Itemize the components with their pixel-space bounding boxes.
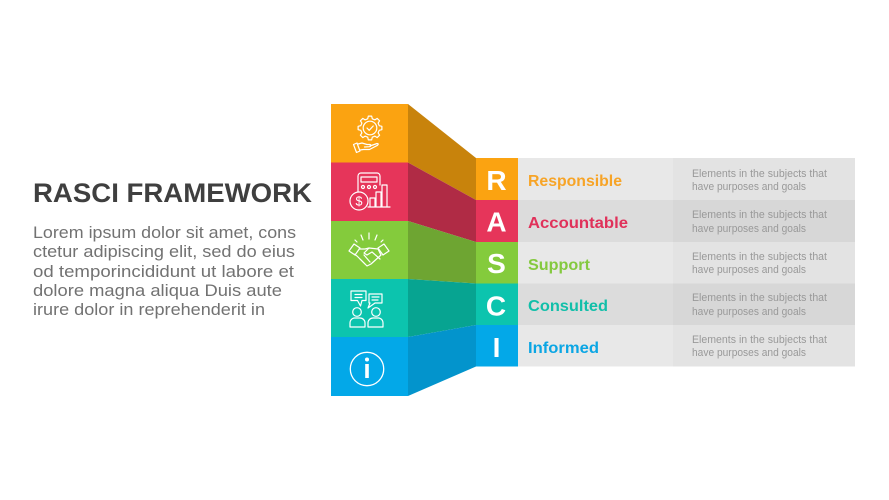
description: Informed [692, 334, 827, 359]
panel: perspective connectors [408, 104, 476, 396]
letter R: R [486, 165, 507, 196]
description: Responsible: Elements in the subjects that [692, 168, 827, 180]
letter S [476, 242, 518, 284]
icon: two people with speech bubbles [350, 291, 383, 327]
icon: information [350, 352, 384, 386]
description: Support: have purposes and goals [692, 264, 806, 276]
letter I: I [493, 332, 500, 363]
icon: calculator, dollar and bars: $ [356, 194, 363, 208]
letter A [476, 200, 518, 242]
body paragraph: Lorem ipsum dolor sit amet, cons [33, 224, 296, 242]
title: RASCI FRAMEWORK [33, 178, 312, 208]
icon: gear and hand [354, 116, 382, 152]
letter R [476, 158, 518, 200]
description: Consulted: have purposes and goals [692, 306, 806, 318]
description: Responsible: have purposes and goals [692, 181, 806, 193]
body paragraph [33, 224, 296, 319]
label: Informed: Informed [528, 340, 599, 357]
description: Accountable [692, 209, 827, 235]
description: Support: Elements in the subjects that [692, 251, 827, 263]
description: Accountable: have purposes and goals [692, 223, 806, 235]
icon: calculator, dollar and bars [350, 173, 390, 210]
label: Responsible: Responsible [528, 173, 622, 190]
description: Consulted: Elements in the subjects that [692, 292, 827, 304]
panel: row backgrounds [518, 158, 855, 366]
description: Informed: have purposes and goals [692, 347, 806, 359]
letter A: A [486, 206, 507, 238]
letter I [476, 325, 518, 366]
body paragraph: ctetur adipiscing elit, sed do eius [33, 243, 295, 261]
body paragraph: irure dolor in reprehenderit in [33, 301, 265, 319]
body paragraph: od temporincididunt ut labore et [33, 263, 294, 281]
body paragraph: dolore magna aliqua Duis aute [33, 282, 282, 300]
letter C: C [486, 290, 506, 322]
description: Accountable: Elements in the subjects that [692, 209, 827, 221]
icon: handshake [349, 233, 389, 266]
description: Responsible [692, 168, 827, 193]
panel: left colour stack [331, 104, 408, 396]
letter S: S [487, 248, 506, 279]
label: Support: Support [528, 257, 591, 274]
letter C [476, 284, 518, 325]
label: Consulted: Consulted [528, 298, 608, 315]
description: Consulted [692, 292, 827, 318]
description: Informed: Elements in the subjects that [692, 334, 827, 346]
description: Support [692, 251, 827, 276]
label: Accountable: Accountable [528, 215, 628, 232]
